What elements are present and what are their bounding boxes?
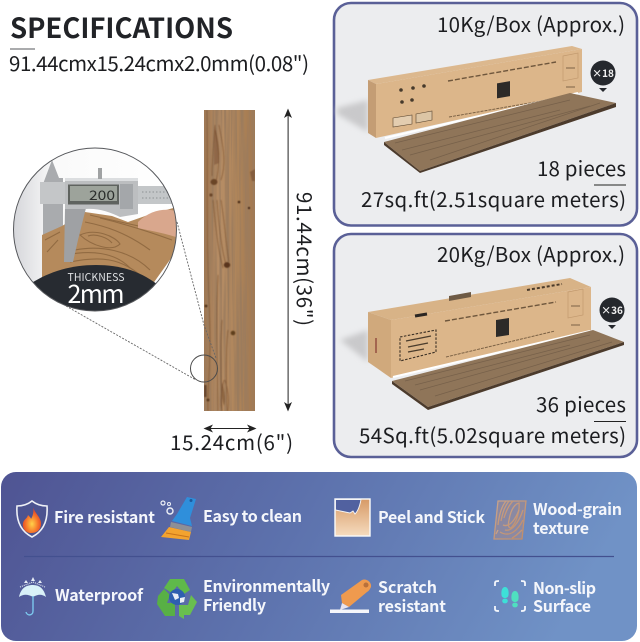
- feature: non-slip surface: Non-slip: [533, 575, 596, 599]
- panel: 20kg box: [334, 234, 637, 457]
- wood plank: [204, 110, 255, 411]
- icon: brush: [161, 497, 196, 540]
- icon: peel and stick: [335, 499, 370, 536]
- dimensions text: 91.44cmx15.24cmx2.0mm(0.08"): [9, 47, 309, 77]
- feature: non-slip surface: Surface: [533, 593, 591, 617]
- dark arc label: [33, 265, 156, 310]
- arrow: width: [204, 424, 256, 432]
- icon: recycle globe: [157, 579, 197, 619]
- coverage label: 54Sq.ft(5.02square meters): [359, 419, 626, 449]
- icon: caliper fixed jaw: [43, 160, 63, 234]
- arrow: length: [284, 108, 292, 412]
- illustration: carton: [368, 278, 591, 378]
- icon: scratch cutter: [330, 579, 371, 613]
- weight heading: 10Kg/Box (Approx.): [437, 8, 625, 38]
- magnifier ring: [190, 355, 218, 382]
- feature: non-slip surface: [533, 575, 596, 617]
- coverage label: 27sq.ft(2.51square meters): [361, 183, 626, 213]
- width label: 15.24cm(6"): [170, 426, 293, 456]
- weight heading: 20Kg/Box (Approx.): [437, 238, 625, 268]
- caliper moving jaw: [64, 208, 86, 262]
- feature: environmentally friendly: [203, 573, 330, 616]
- zoom leader lines: [66, 222, 216, 380]
- panel: 10kg box: [334, 3, 637, 226]
- feature: wood-grain texture: [533, 496, 622, 539]
- feature: waterproof: Waterproof: [55, 582, 144, 606]
- length label: 91.44cm(36"): [291, 192, 321, 326]
- feature: wood-grain texture: texture: [533, 515, 589, 539]
- icon: footprints: [495, 581, 525, 611]
- feature: scratch resistant: [378, 574, 446, 617]
- feature: scratch resistant: Scratch: [378, 574, 437, 598]
- icon: umbrella: [19, 577, 46, 615]
- icon: wood grain: [494, 501, 526, 539]
- thickness value: 2mm: [68, 275, 124, 311]
- feature: scratch resistant: resistant: [378, 593, 446, 617]
- white strip: [385, 93, 578, 138]
- feature: easy to clean: Easy to clean: [203, 503, 302, 527]
- wood sample: [42, 207, 177, 285]
- badge: x36: [600, 298, 624, 329]
- feature: environmentally friendly: Environmentally: [203, 573, 330, 597]
- badge: x18: ×18: [592, 65, 614, 80]
- feature: environmentally friendly: Friendly: [203, 592, 266, 616]
- thickness inset: 200: [89, 184, 115, 204]
- box shadow: [340, 330, 368, 362]
- illustration: plank sample: [392, 330, 624, 410]
- feature: peel and stick: Peel and Stick: [378, 504, 485, 528]
- icon: fire shield: [17, 501, 47, 537]
- illustration: plank sample: [384, 93, 616, 173]
- thickness inset: [13, 148, 177, 320]
- caliper rail: [138, 186, 172, 204]
- pieces label: 36 pieces: [536, 388, 626, 418]
- finger: [138, 210, 176, 237]
- feature: fire resistant: Fire resistant: [54, 504, 155, 528]
- panel: features: [1, 472, 637, 641]
- illustration: carton: [368, 46, 582, 138]
- pieces label: 18 pieces: [537, 152, 626, 182]
- white strip: [393, 331, 590, 377]
- box shadow: [337, 100, 368, 132]
- feature: wood-grain texture: Wood-grain: [533, 496, 622, 520]
- title: SPECIFICATIONS: [10, 6, 233, 46]
- thickness label: THICKNESS: [68, 270, 124, 285]
- caliper body: [65, 179, 138, 217]
- badge: x36: ×36: [601, 302, 623, 317]
- badge: x18: [590, 60, 616, 92]
